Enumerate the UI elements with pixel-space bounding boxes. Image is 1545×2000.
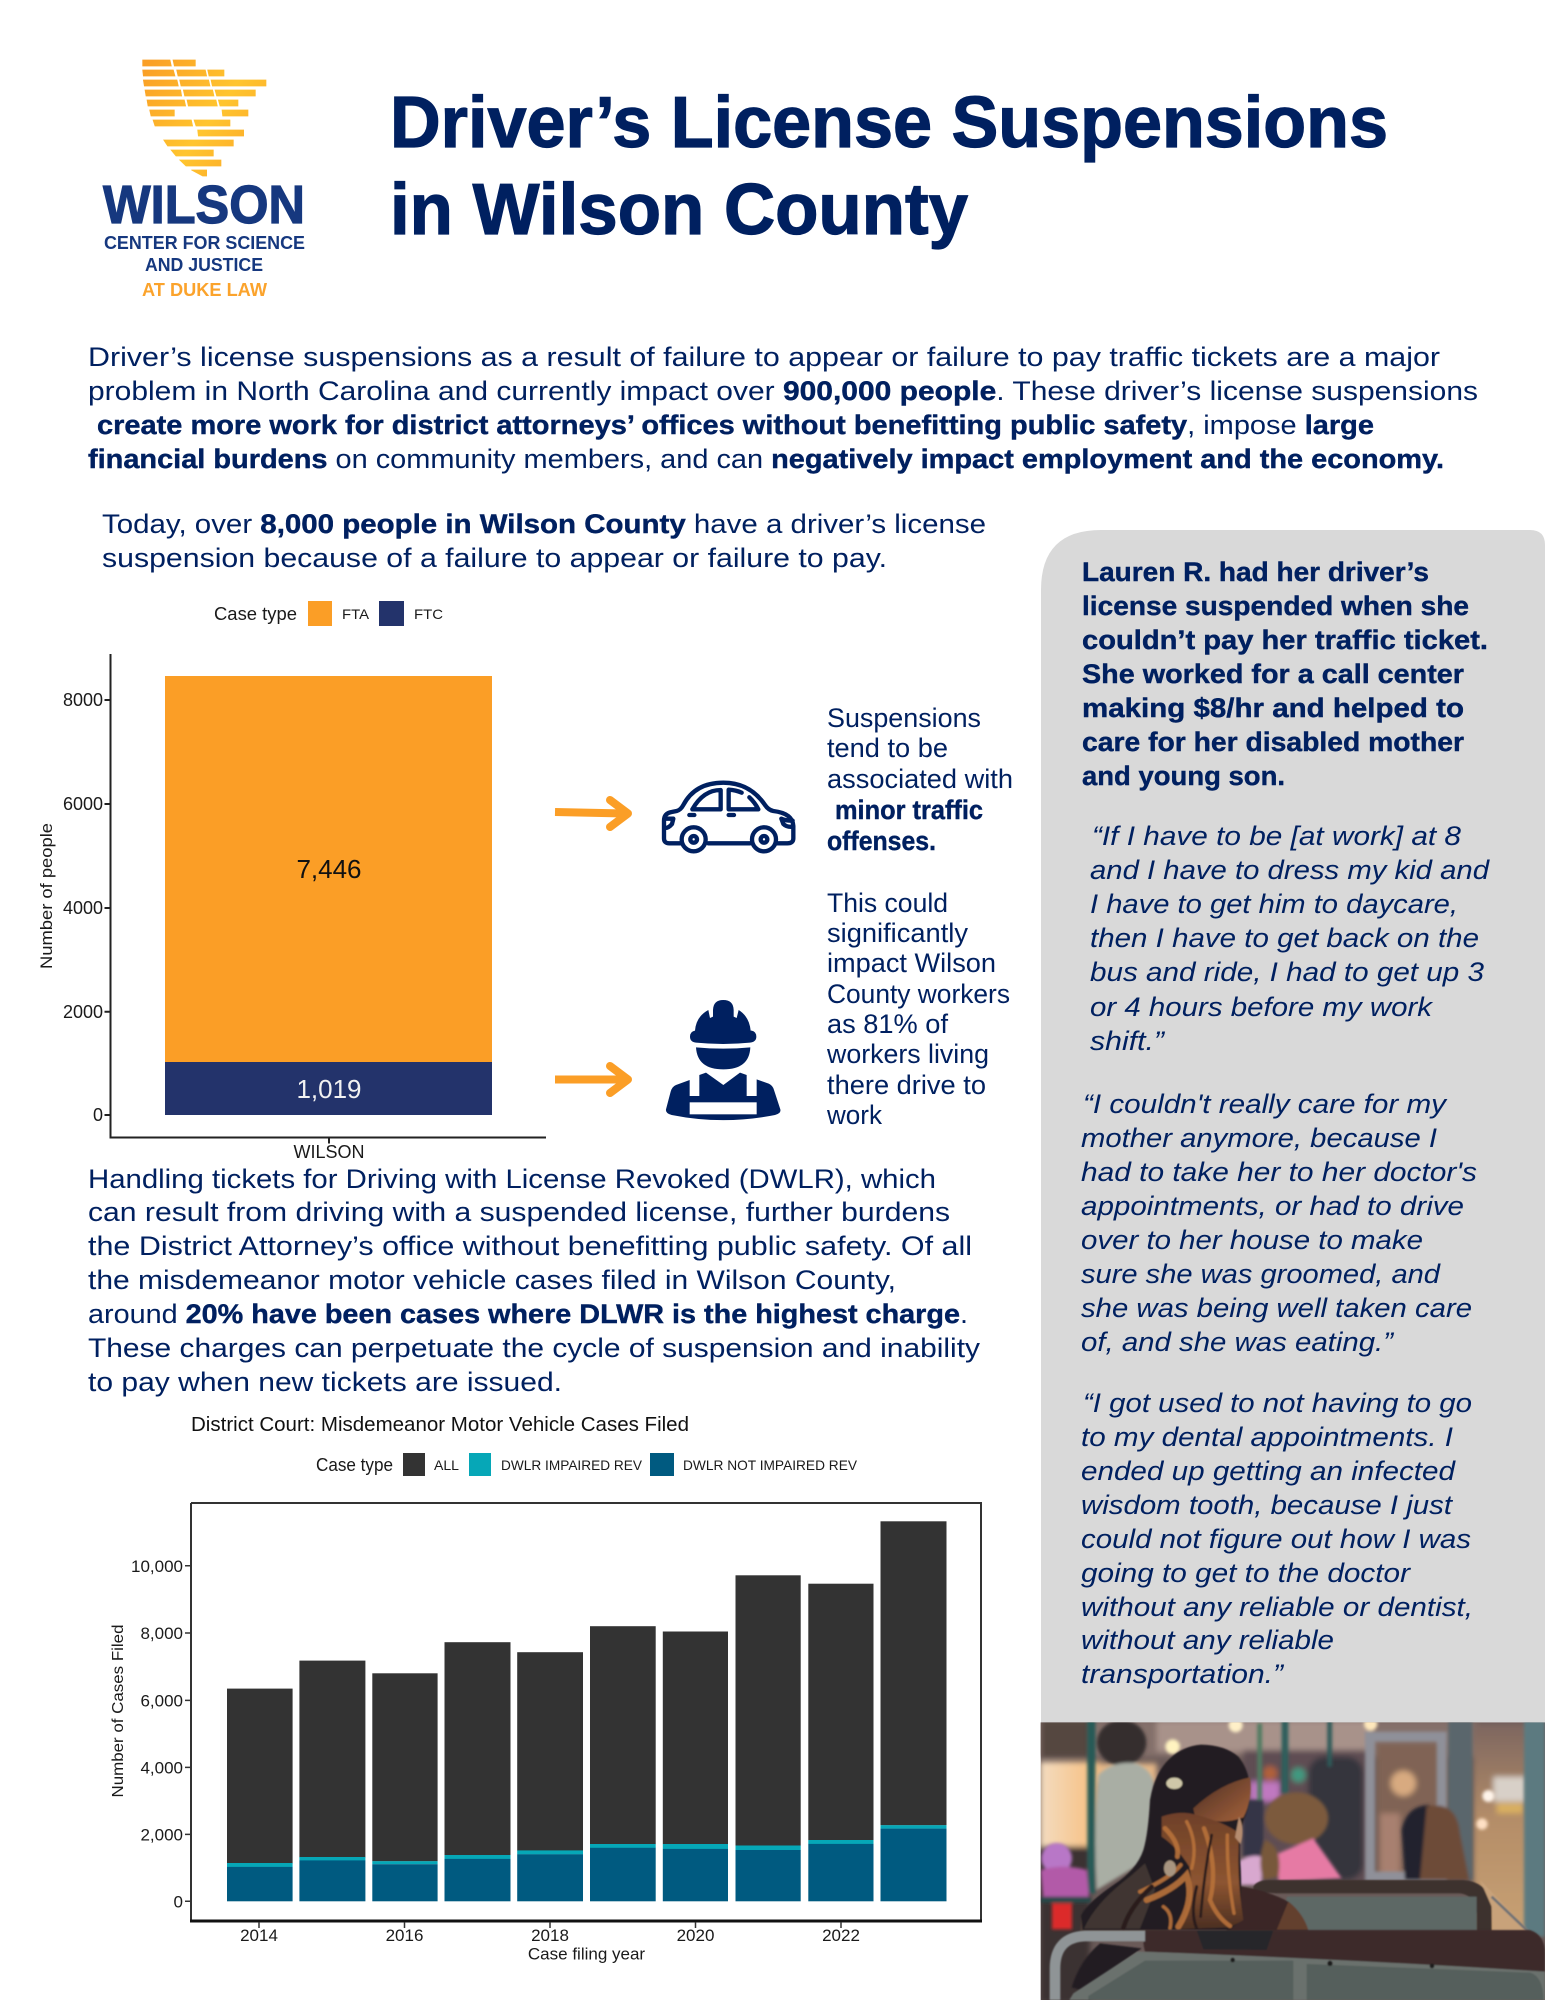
icon: car — [664, 783, 793, 851]
legend: case type: DWLR IMPAIRED REV — [501, 1457, 643, 1473]
axes — [104, 654, 546, 1144]
y axis labels: 0 — [174, 1892, 183, 1912]
quote: getting to work: bus and ride, I had to get up 3 — [1090, 957, 1484, 987]
grey fringe of hair — [1084, 1863, 1155, 1929]
quote: caring for mother: “I couldn't really care for my — [1083, 1089, 1448, 1119]
story heading: Lauren R. had her driver’s — [1082, 557, 1429, 587]
title: in Wilson County — [390, 170, 968, 250]
hair under rail — [1072, 1943, 1142, 1991]
side note: minor traffic offenses: tend to be — [827, 733, 948, 763]
intro paragraph: financial burdens on community members, and can negatively impact employment and the economy. — [88, 444, 1444, 474]
background behind face — [1243, 1800, 1263, 1857]
side note: impact on workers: County workers — [827, 979, 1010, 1009]
y axis labels: 10,000 — [131, 1557, 183, 1576]
quote: dental appointments: going to get to the doctor — [1081, 1558, 1411, 1588]
side note: impact on workers: workers living — [826, 1039, 989, 1069]
plot frame — [191, 1503, 981, 1920]
panel: Lauren R. story — [1041, 530, 1545, 2000]
x axis label: WILSON — [293, 1142, 365, 1162]
x axis title: Case filing year — [528, 1944, 645, 1964]
DWLR paragraph: the misdemeanor motor vehicle cases filed in Wilson County, — [88, 1265, 896, 1295]
logo: Wilson Center for Science and Justice — [103, 60, 305, 300]
DWLR paragraph: the District Attorney’s office without benefitting public safety. Of all — [88, 1231, 972, 1261]
y axis labels — [131, 1557, 183, 1912]
logo line: at Duke Law: AT DUKE LAW — [142, 280, 267, 300]
cheek — [1235, 1817, 1242, 1844]
logo mark: striped orange shield — [143, 60, 266, 176]
side note: impact on workers — [826, 888, 1010, 1130]
quote: dental appointments: “I got used to not having to go — [1083, 1388, 1472, 1418]
child in pink — [1041, 1843, 1072, 1874]
front seat — [1055, 1930, 1545, 2000]
DWLR paragraph: Handling tickets for Driving with License Revoked (DWLR), which — [88, 1164, 936, 1194]
quote: caring for mother: sure she was groomed, and — [1081, 1259, 1441, 1289]
side note: minor traffic offenses — [827, 703, 1013, 856]
logo line: and justice: AND JUSTICE — [145, 255, 263, 275]
x axis labels: 2020 — [677, 1926, 714, 1945]
side note: minor traffic offenses: Suspensions — [827, 703, 981, 733]
legend: case type: FTC — [414, 606, 443, 622]
x axis labels: 2016 — [386, 1926, 423, 1945]
title: Driver’s License Suspensions — [390, 83, 1388, 163]
bars: all cases — [227, 1521, 946, 1864]
second seat — [1253, 1880, 1492, 1935]
x axis labels: 2018 — [531, 1926, 569, 1945]
quote: dental appointments: to my dental appointments. I — [1081, 1422, 1454, 1452]
icon: construction worker — [666, 1000, 780, 1120]
passenger with braid — [1265, 1792, 1328, 1844]
side note: impact on workers: work — [826, 1100, 882, 1130]
quote: caring for mother: of, and she was eating.” — [1081, 1327, 1394, 1357]
quote: caring for mother: appointments, or had to drive — [1081, 1191, 1464, 1221]
quote: caring for mother: over to her house to make — [1081, 1225, 1423, 1255]
logo wordmark: WILSON — [103, 175, 305, 235]
quote: getting to work — [1090, 821, 1490, 1056]
falling hair — [1162, 1813, 1243, 1929]
quote: getting to work: shift.” — [1090, 1026, 1165, 1056]
y axis labels: 2000 — [63, 1002, 103, 1022]
y axis labels: 0 — [93, 1105, 103, 1125]
quote: dental appointments: wisdom tooth, because I just — [1081, 1490, 1454, 1520]
chart title: District Court: Misdemeanor Motor Vehicle Cases Filed — [191, 1414, 689, 1436]
y axis labels: 8000 — [63, 690, 103, 710]
intro paragraph: Driver’s license suspensions as a result of failure to appear or failure to pay traffic tickets are a major — [88, 342, 1440, 372]
legend: case type: ALL — [434, 1457, 459, 1473]
x axis labels: 2014 — [240, 1926, 278, 1945]
legend: case type — [214, 601, 443, 626]
x axis labels: 2022 — [822, 1926, 860, 1945]
standing passenger — [1097, 1720, 1146, 1765]
y axis labels: 2,000 — [140, 1826, 183, 1844]
jacket — [1227, 1885, 1308, 1932]
legend: case type: Case type — [316, 1455, 393, 1475]
quote: caring for mother: she was being well taken care — [1081, 1293, 1472, 1323]
bar: failure to compensate — [165, 1062, 492, 1115]
legend: case type: FTA — [342, 606, 370, 622]
photo: woman riding a bus — [1037, 1717, 1545, 2000]
story heading: care for her disabled mother — [1082, 727, 1465, 757]
arrow to worker — [555, 1066, 628, 1093]
quote: getting to work: I have to get him to daycare, — [1090, 889, 1458, 919]
DWLR paragraph: around 20% have been cases where DLWR is the highest charge . — [88, 1299, 968, 1329]
bars: DWLR impaired revocation — [227, 1825, 946, 1867]
side note: minor traffic offenses: minor traffic — [835, 795, 983, 825]
y axis labels: 4000 — [63, 898, 103, 918]
side note: impact on workers: impact Wilson — [827, 948, 996, 978]
reddish upper hair — [1193, 1777, 1251, 1822]
intro paragraph: create more work for district attorneys’ offices without benefitting public safety , impose large — [97, 410, 1374, 440]
quote: getting to work: or 4 hours before my work — [1090, 992, 1434, 1022]
x axis labels — [240, 1926, 860, 1945]
intro paragraph: problem in North Carolina and currently impact over 900,000 people . These driver’s license suspensions — [88, 376, 1478, 406]
side note: minor traffic offenses: offenses. — [827, 826, 936, 856]
quote: dental appointments — [1081, 1388, 1473, 1689]
y axis labels: 4,000 — [140, 1758, 183, 1778]
highlighted strands — [1140, 1822, 1234, 1928]
y axis title: Number of Cases Filed — [110, 1624, 127, 1798]
legend: case type: Case type — [214, 604, 297, 624]
bar: failure to appear — [165, 676, 492, 1062]
story heading: and young son. — [1082, 761, 1285, 791]
y axis title: Number of people — [37, 823, 56, 969]
side note: impact on workers: This could — [827, 888, 948, 918]
Wilson County statement — [102, 509, 986, 573]
story heading: license suspended when she — [1082, 591, 1469, 621]
title — [390, 83, 1388, 250]
Wilson County statement: suspension because of a failure to appear or failure to pay. — [102, 543, 887, 573]
side note: impact on workers: there drive to — [827, 1070, 986, 1100]
y axis labels: 6,000 — [140, 1692, 183, 1710]
legend: case type: DWLR NOT IMPAIRED REV — [683, 1457, 858, 1473]
bars: DWLR not impaired revocation — [227, 1829, 946, 1901]
bar chart: suspensions by case type — [37, 601, 546, 1162]
story heading: She worked for a call center — [1082, 659, 1465, 689]
logo line: center for science: CENTER FOR SCIENCE — [104, 233, 305, 253]
side note: impact on workers: as 81% of — [827, 1009, 949, 1039]
quote: getting to work: then I have to get back on the — [1090, 923, 1479, 953]
quote: getting to work: “If I have to be [at work] at 8 — [1092, 821, 1461, 851]
quote: getting to work: and I have to dress my kid and — [1090, 855, 1490, 885]
story heading: couldn’t pay her traffic ticket. — [1082, 625, 1488, 655]
passenger at right — [1402, 1805, 1430, 1880]
side note: minor traffic offenses: associated with — [827, 764, 1013, 794]
arrow to car — [555, 800, 628, 827]
quote: caring for mother — [1081, 1089, 1477, 1357]
Wilson County statement: Today, over 8,000 people in Wilson County have a driver’s license — [102, 509, 986, 539]
main hair silhouette — [1081, 1745, 1250, 1930]
intro paragraph — [88, 342, 1478, 474]
quote: caring for mother: had to take her to her doctor's — [1081, 1157, 1477, 1187]
quote: dental appointments: ended up getting an infected — [1081, 1456, 1456, 1486]
side note: impact on workers: significantly — [827, 918, 969, 948]
background details — [1087, 1720, 1095, 1893]
dark strands — [1123, 1835, 1212, 1928]
quote: dental appointments: could not figure out how I was — [1081, 1524, 1471, 1554]
value: FTC: 1,019 — [296, 1074, 362, 1104]
DWLR paragraph: to pay when new tickets are issued. — [88, 1367, 562, 1397]
quote: dental appointments: without any reliable — [1081, 1625, 1334, 1655]
y axis labels: 8,000 — [140, 1624, 183, 1643]
story heading: making $8/hr and helped to — [1082, 693, 1464, 723]
DWLR paragraph: can result from driving with a suspended license, further burdens — [88, 1197, 950, 1227]
quote: caring for mother: mother anymore, because I — [1081, 1123, 1438, 1153]
quote: dental appointments: transportation.” — [1081, 1659, 1284, 1689]
y axis labels: 6000 — [63, 794, 103, 814]
DWLR paragraph: These charges can perpetuate the cycle of suspension and inability — [88, 1333, 981, 1363]
bar chart: misdemeanor motor vehicle cases filed — [110, 1414, 982, 1964]
value: FTA: 7,446 — [296, 854, 362, 884]
story heading — [1082, 557, 1488, 791]
legend: case type — [316, 1453, 858, 1476]
y axis labels — [63, 690, 103, 1125]
DWLR paragraph — [88, 1164, 981, 1397]
quote: dental appointments: without any reliable or dentist, — [1081, 1592, 1473, 1622]
